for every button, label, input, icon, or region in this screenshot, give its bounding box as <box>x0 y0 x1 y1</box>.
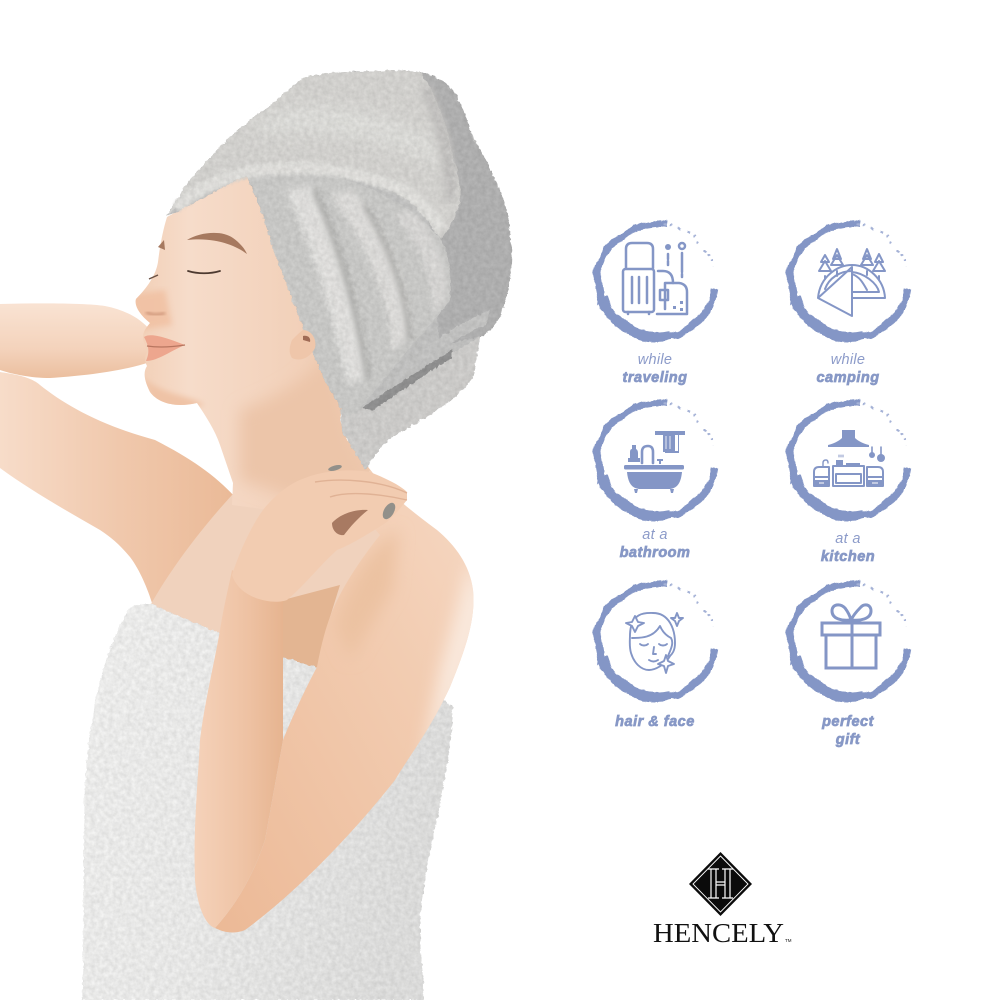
face and neck <box>136 176 373 495</box>
closed eye <box>188 271 220 273</box>
towel back panel <box>420 72 512 345</box>
icon: bathtub <box>598 403 714 516</box>
eyebrow <box>187 233 247 254</box>
label: at a kitchen: kitchen <box>821 549 875 565</box>
label: while camping: camping <box>816 370 880 386</box>
fingernail <box>328 464 342 472</box>
logo: Hencely <box>653 852 792 948</box>
icon: camping tent <box>791 224 907 337</box>
icon: kitchen <box>791 403 907 516</box>
hand <box>232 464 407 602</box>
shadowed chest between arms <box>283 585 340 670</box>
label: while traveling <box>623 352 687 386</box>
trademark: TM <box>785 938 792 943</box>
forearm <box>195 570 283 928</box>
label: perfect gift <box>821 714 875 748</box>
gap between thumb and fingers <box>332 510 368 535</box>
lips <box>144 335 185 361</box>
label: at a bathroom: at a <box>642 527 668 543</box>
thumbnail <box>380 501 398 521</box>
label: while traveling: while <box>638 352 672 368</box>
head towel <box>167 70 512 470</box>
photo: woman with towel wrapped around head and body <box>0 70 512 1000</box>
front arm: shoulder and upper arm <box>215 470 490 932</box>
body towel <box>82 604 453 1000</box>
chest and neck skin <box>150 440 400 672</box>
towel upper flap <box>167 70 460 238</box>
raised back arm <box>0 303 240 610</box>
label: at a bathroom <box>620 527 690 561</box>
towel dark seam <box>362 350 452 410</box>
logo wordmark: HENCELY <box>653 918 784 948</box>
label: while camping <box>816 352 880 386</box>
label: perfect gift: gift <box>835 732 861 748</box>
icon: gift box <box>791 584 907 697</box>
nostril <box>146 312 165 315</box>
logo diamond <box>689 852 752 916</box>
label: while camping: while <box>831 352 865 368</box>
towel front wrap <box>246 171 451 417</box>
ear <box>290 330 315 360</box>
label: hair and face: hair & face <box>615 714 695 730</box>
icon: travel luggage <box>598 224 714 337</box>
label: at a bathroom: bathroom <box>620 545 690 561</box>
label: while traveling: traveling <box>623 370 687 386</box>
icon: face with sparkles <box>598 584 714 697</box>
towel lower band <box>340 337 480 470</box>
label: at a kitchen <box>821 531 875 565</box>
towel silhouette base <box>167 71 509 470</box>
towel ribbed edge <box>392 310 490 385</box>
label: at a kitchen: at a <box>835 531 861 547</box>
label: perfect gift: perfect <box>821 714 875 730</box>
